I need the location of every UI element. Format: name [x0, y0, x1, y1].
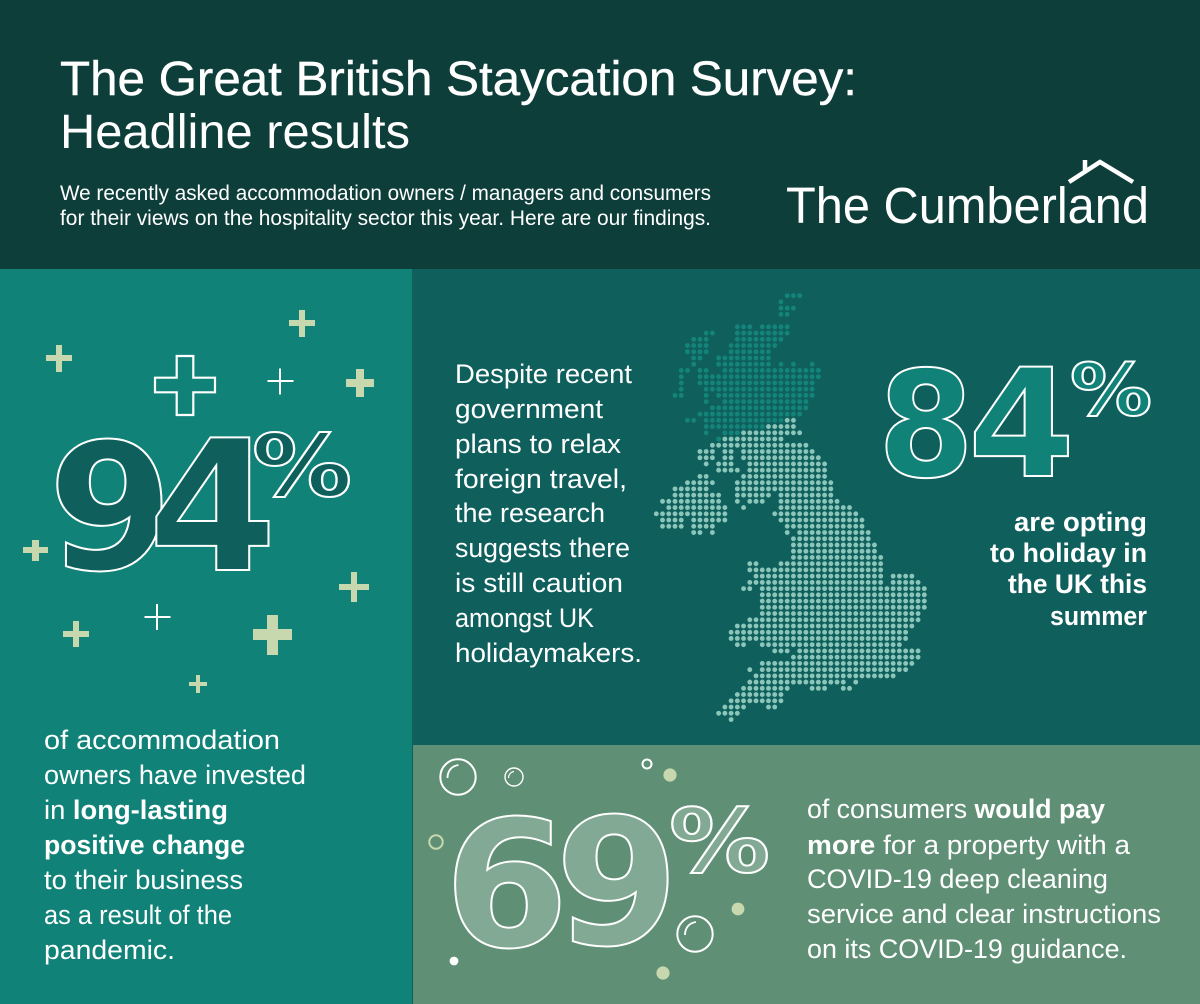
intro text — [60, 182, 711, 230]
text: owners invested: of accommodation — [44, 725, 280, 755]
text: owners invested: to their business — [44, 865, 243, 895]
text: consumers would pay more: more for a property with a — [807, 830, 1130, 860]
statistic: 84% — [878, 338, 1152, 512]
text: owners invested — [44, 725, 306, 965]
icons: thin plus signs — [144, 368, 294, 630]
dot map: England, Wales and Northern Ireland — [656, 420, 924, 720]
text: government plans: Despite recent — [455, 359, 633, 389]
statistic: 69%: 6 — [444, 783, 569, 988]
statistic: 84%: 8 — [878, 340, 974, 511]
dot map of the UK — [656, 296, 924, 720]
text: government plans: suggests there — [455, 533, 630, 563]
text: opting to holiday in the UK — [990, 507, 1147, 631]
text: government plans: government — [455, 394, 604, 424]
statistic: 69%: % — [669, 790, 770, 893]
text: owners invested: in long-lasting — [44, 795, 228, 825]
text: consumers would pay more: of consumers would pay — [807, 794, 1105, 824]
text: opting to holiday in the UK: the UK this — [1008, 569, 1147, 599]
text: owners invested: positive change — [44, 830, 245, 860]
icons: filled plus signs — [23, 310, 374, 693]
text: government plans: plans to relax — [455, 429, 621, 459]
panel: 94 percent — [0, 269, 412, 1004]
icon: outlined plus — [155, 356, 215, 415]
statistic: 69%: 9 — [555, 781, 679, 986]
text: owners invested: pandemic. — [44, 935, 175, 965]
intro text: for their views on the hospitality sector this year. Here are our findings. — [60, 207, 711, 230]
dot map: Scotland — [675, 296, 818, 439]
icons: bubbles — [429, 759, 744, 980]
text: consumers would pay more: COVID-19 deep cleaning — [807, 864, 1108, 894]
title — [60, 53, 857, 159]
statistic: 94% — [48, 401, 352, 613]
text: owners invested: owners have invested — [44, 760, 306, 790]
text: government plans — [455, 359, 642, 668]
text: opting to holiday in the UK: are opting — [1014, 507, 1147, 537]
text: consumers would pay more: service and clear instructions — [807, 899, 1161, 929]
text: consumers would pay more: on its COVID-19 guidance. — [807, 934, 1127, 964]
text: government plans: the research — [455, 498, 605, 528]
statistic: 69% — [444, 781, 770, 988]
text: government plans: amongst UK — [455, 603, 594, 633]
statistic: 84%: % — [1070, 348, 1152, 432]
logo: The Cumberland: The Cumberland — [786, 177, 1149, 234]
text: opting to holiday in the UK: summer — [1050, 601, 1147, 631]
text: consumers would pay more — [807, 794, 1161, 964]
text: government plans: foreign travel, — [455, 464, 627, 494]
text: owners invested: as a result of the — [44, 900, 232, 930]
title: The Great British Staycation Survey: — [60, 53, 857, 106]
intro text: We recently asked accommodation owners / managers and consumers — [60, 182, 711, 205]
statistic: 94%: % — [252, 417, 352, 517]
panel: header — [0, 0, 1200, 269]
text: government plans: is still caution — [455, 568, 623, 598]
text: opting to holiday in the UK: to holiday in — [990, 538, 1147, 568]
statistic: 94%: 4 — [148, 401, 277, 613]
panel: 69 percent — [413, 745, 1200, 1004]
panel: 84 percent — [413, 269, 1200, 745]
text: government plans: holidaymakers. — [455, 638, 642, 668]
statistic: 84%: 4 — [968, 338, 1075, 512]
title: Headline results — [60, 106, 410, 159]
statistic: 94%: 9 — [48, 406, 173, 611]
